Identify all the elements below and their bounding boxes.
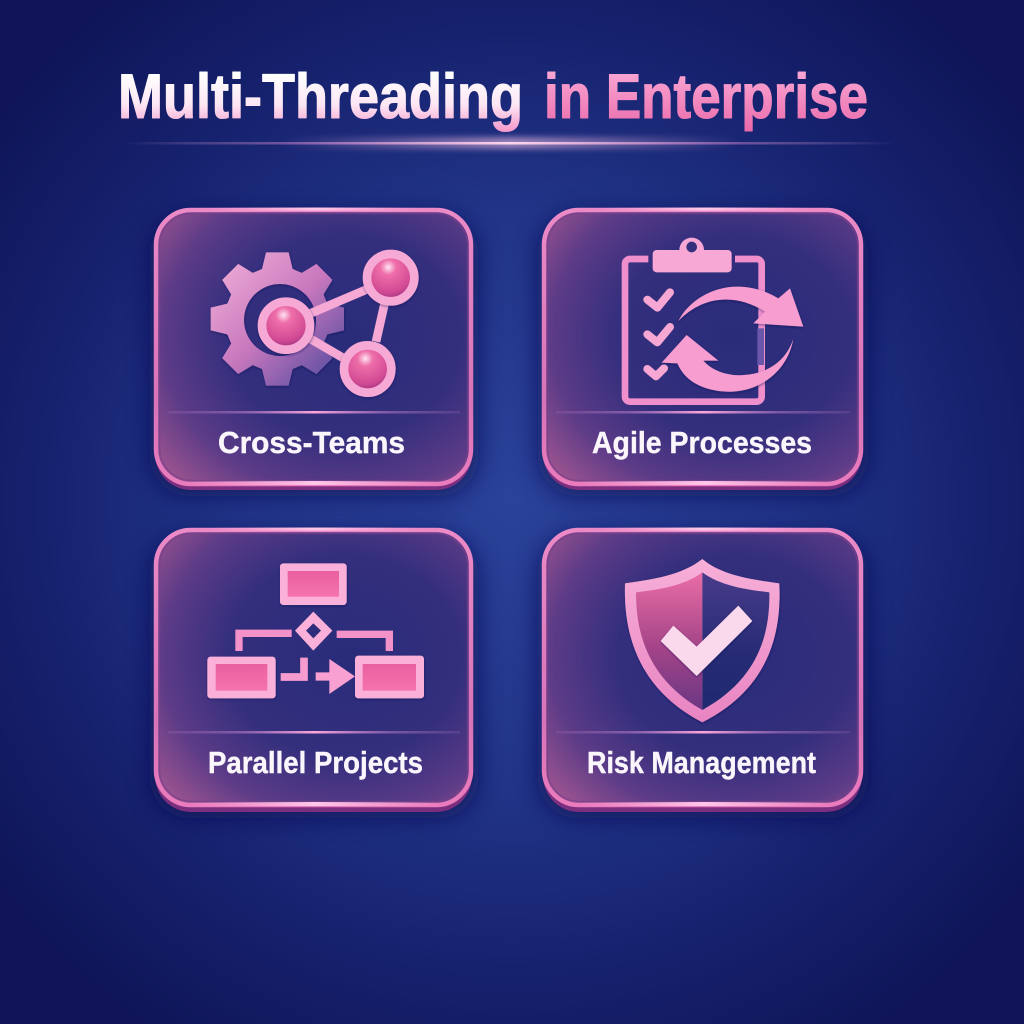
- flow box: top: [280, 563, 347, 605]
- connector: elbow: [281, 658, 304, 677]
- gear: [211, 252, 344, 386]
- title: in Enterprise: [544, 62, 868, 132]
- icon: clipboard with cycle arrows: [625, 238, 803, 402]
- panel: parallel projects: [150, 528, 478, 818]
- connector: right: [337, 634, 389, 651]
- node: top right: [367, 254, 414, 301]
- faded frame segment: [757, 328, 764, 365]
- label: Risk Management: [587, 745, 816, 780]
- checklist marks: [647, 292, 670, 376]
- icon: gear and connected nodes: [211, 252, 414, 393]
- decision diamond: [295, 612, 332, 651]
- connector lines: [307, 287, 385, 360]
- shield left half: [636, 572, 702, 710]
- arrow: [316, 659, 355, 694]
- icon: shield with check mark: [625, 559, 780, 722]
- panel: agile processes: [538, 208, 868, 496]
- label: Cross-Teams: [218, 425, 405, 460]
- label: Parallel Projects: [208, 745, 423, 780]
- label: Agile Processes: [592, 425, 812, 460]
- cycle arrow: top: [678, 287, 803, 327]
- shield right half: [702, 572, 769, 710]
- title: [118, 62, 868, 132]
- shield rim: [625, 559, 780, 722]
- cycle arrow: bottom: [662, 335, 793, 392]
- panel: cross-teams: [150, 208, 478, 496]
- title underline glow: [125, 137, 895, 149]
- check mark: [661, 606, 752, 676]
- flow box: right: [355, 656, 424, 698]
- connector: left: [239, 633, 292, 651]
- title: Multi-Threading: [118, 62, 523, 132]
- node: center: [262, 302, 310, 350]
- clipboard frame: [625, 259, 762, 402]
- clipboard clip: [653, 238, 732, 272]
- icon: flowchart: [207, 563, 424, 698]
- panel: risk management: [538, 528, 868, 818]
- flow box: left: [207, 657, 276, 698]
- node: bottom: [344, 345, 391, 393]
